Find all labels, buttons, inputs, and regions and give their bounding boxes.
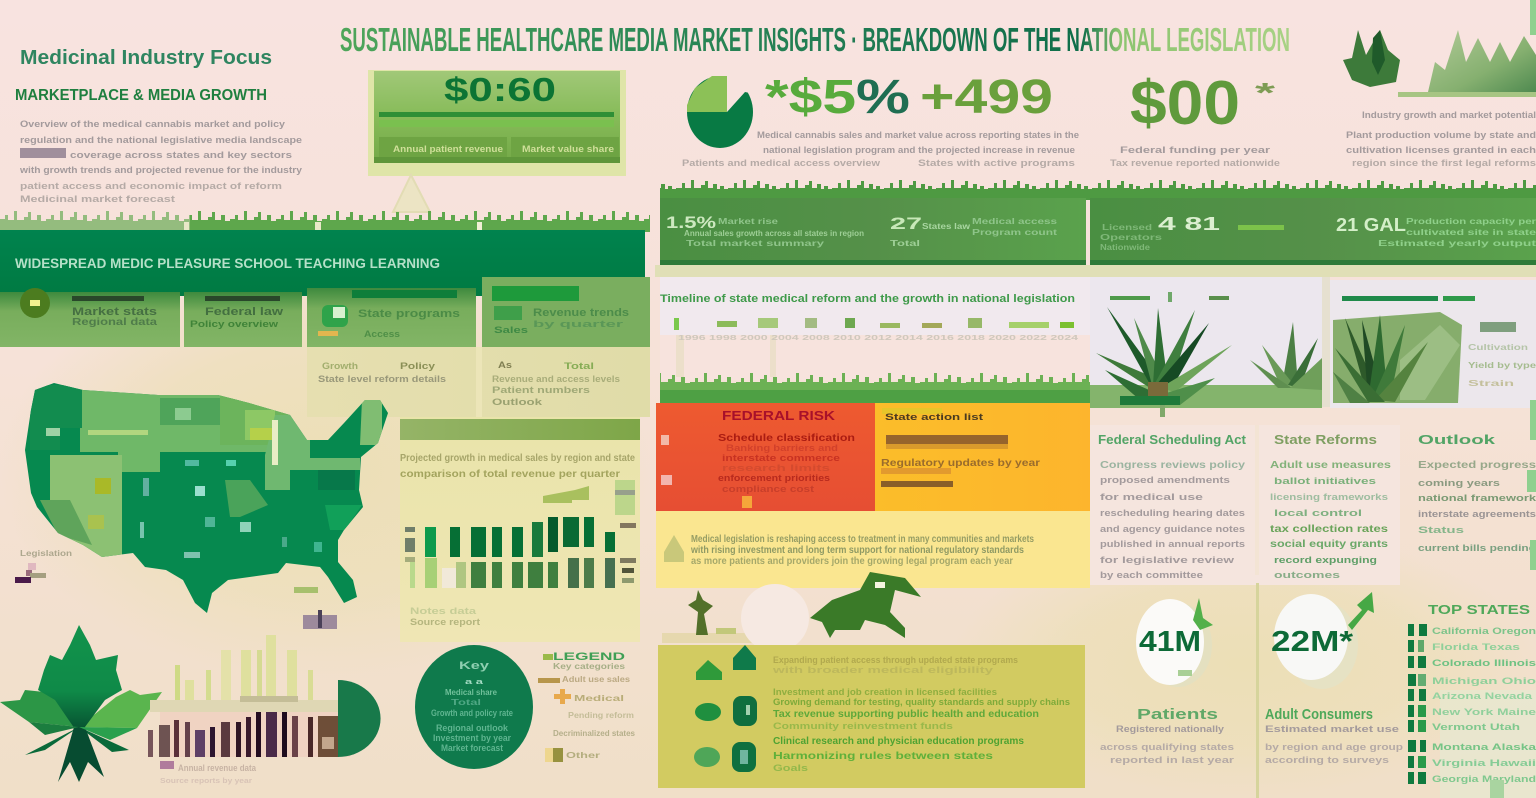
list panel bottom right: Montana Alaska — [1432, 742, 1536, 752]
circle callout: Regional outlook — [436, 723, 509, 733]
chart subtitle — [400, 453, 635, 480]
map key: Legislation — [20, 549, 72, 558]
stat 1 caption — [1100, 706, 1235, 765]
text block top right: Industry growth and market potential — [1362, 110, 1536, 120]
chart panel — [400, 417, 640, 642]
panel: plant photo 2: Strain — [1468, 379, 1514, 388]
stat circle 2: 22M* — [1271, 626, 1354, 658]
card 3: State programs — [358, 308, 460, 320]
card 4: by quarter — [533, 319, 624, 329]
stat 3: Nationwide — [1100, 243, 1151, 252]
column 2 — [1270, 432, 1392, 580]
list panel bottom right: Virginia Hawaii — [1432, 758, 1536, 768]
card 2 — [184, 292, 302, 347]
column 2: Adult use measures — [1270, 460, 1392, 471]
row 3: Clinical research and physician education programs — [773, 736, 1024, 747]
stat card: price: Market value share — [522, 144, 614, 154]
card 2: Federal law — [205, 306, 284, 318]
divider strip — [655, 265, 1536, 277]
agave in photo — [1333, 315, 1428, 403]
notes panel under cards: Revenue and access levels — [492, 374, 620, 384]
chart footnote: Notes data — [410, 606, 477, 616]
row 2: Community reinvestment funds — [773, 721, 953, 731]
notes panel under cards: Policy — [400, 361, 435, 371]
row 1 — [696, 645, 1018, 680]
stat 1: Total market summary — [686, 239, 825, 248]
column 2: ballot initiatives — [1274, 476, 1376, 486]
stat 3: 4 81 — [1158, 214, 1220, 234]
text block top right — [1346, 110, 1536, 168]
panel: plant photo 2 — [1322, 277, 1536, 408]
column 2: local control — [1274, 508, 1362, 518]
column 3: Outlook — [1418, 432, 1496, 447]
callout: red warning panel: Schedule classification — [718, 433, 855, 444]
stat 1: Annual sales growth across all states in region — [684, 229, 864, 238]
legend: Pending reform — [568, 711, 634, 720]
intro text block: with growth trends and projected revenue for the industry — [19, 165, 302, 175]
big stats: $00 — [1130, 69, 1240, 138]
card 4: Sales — [494, 325, 528, 335]
column 1: by each committee — [1100, 570, 1203, 580]
callout: yellow note: with rising investment and long term support for national regulatory standards — [690, 545, 1024, 556]
stat circle 2 — [1271, 592, 1374, 689]
column 3: national framework — [1418, 493, 1536, 503]
bar chart caption: Annual revenue data — [178, 763, 257, 773]
list panel bottom right: Michigan Ohio — [1432, 676, 1536, 686]
stat card: price: Annual patient revenue — [393, 144, 503, 154]
column 1 — [1098, 432, 1247, 580]
legend: Adult use sales — [562, 675, 631, 684]
panel row: four green cards — [0, 277, 650, 347]
intro text block: coverage across states and key sectors — [70, 150, 292, 160]
text block top right: region since the first legal reforms — [1352, 158, 1536, 168]
row 2: Investment and job creation in licensed facilities — [773, 687, 997, 697]
column 1: rescheduling hearing dates — [1100, 508, 1245, 518]
list panel bottom right: Georgia Maryland — [1432, 774, 1536, 784]
map: United States legislation status — [20, 380, 392, 620]
list panel bottom right: Vermont Utah — [1432, 722, 1520, 732]
legend: Other — [566, 751, 600, 760]
list rows — [1408, 624, 1427, 784]
column 2: State Reforms — [1274, 432, 1377, 447]
circle callout: Market forecast — [441, 743, 503, 753]
callout: red warning panel: FEDERAL RISK — [722, 408, 836, 423]
big stats — [765, 69, 1275, 138]
big stats: * — [1255, 77, 1275, 108]
western states — [50, 455, 122, 560]
small agave — [1250, 322, 1322, 390]
pale background bars — [175, 635, 313, 710]
stat 1 caption: Registered nationally — [1116, 724, 1224, 734]
intro text block: MARKETPLACE & MEDIA GROWTH — [15, 87, 267, 104]
panel: policy columns — [1090, 425, 1536, 585]
column 1: Congress reviews policy — [1100, 460, 1246, 471]
stat 4: cultivated site in state — [1406, 228, 1536, 237]
circle callout: Growth and policy rate — [431, 708, 513, 718]
stat 3: Operators — [1100, 233, 1163, 242]
large agave — [1096, 307, 1232, 405]
column 2: outcomes — [1274, 570, 1340, 580]
column 1: for legislative review — [1100, 555, 1236, 565]
callout: orange panel — [875, 403, 1090, 511]
column 3: Expected progress — [1418, 460, 1536, 471]
stat 2: Total — [890, 239, 920, 248]
intro text block: patient access and economic impact of reform — [20, 181, 282, 191]
row 1: Expanding patient access through updated state programs — [773, 655, 1018, 665]
stat 2: Medical access — [972, 217, 1058, 226]
stat 2 caption: according to surveys — [1265, 755, 1389, 765]
circle callout: Key — [459, 660, 490, 672]
callout: red warning panel: compliance cost — [722, 484, 814, 494]
chart subtitle: Projected growth in medical sales by region and state — [400, 453, 635, 464]
icon: large cannabis leaf — [0, 625, 162, 782]
pie: half-circle — [338, 680, 381, 757]
label band — [150, 700, 348, 712]
notes panel under cards — [307, 347, 650, 417]
divider vertical — [1256, 583, 1259, 798]
stat descriptions: Patients and medical access overview — [682, 158, 881, 168]
column 3: Status — [1418, 525, 1464, 535]
column 2: licensing frameworks — [1270, 492, 1388, 502]
callout: red warning panel: research limits — [722, 463, 830, 473]
banner: left: WIDESPREAD MEDIC PLEASURE SCHOOL TEACHING LEARNING — [15, 255, 440, 271]
icon: note leaf — [664, 535, 684, 562]
callout: yellow note: Medical legislation is reshaping access to treatment in many communities and markets — [691, 534, 1034, 545]
card 1 — [0, 288, 180, 347]
row 3: Harmonizing rules between states — [773, 751, 994, 762]
legend: LEGEND — [553, 651, 625, 663]
column 1: and agency guidance notes — [1100, 524, 1245, 534]
callout: red warning panel: enforcement priorities — [718, 473, 830, 483]
card 4: Revenue trends — [533, 307, 629, 319]
chart header — [400, 419, 640, 440]
list panel bottom right: California Oregon — [1432, 626, 1536, 636]
banner: left — [0, 230, 645, 296]
notes panel under cards: State level reform details — [318, 374, 446, 384]
stat 4: Estimated yearly output — [1378, 239, 1536, 248]
panel: olive list — [658, 645, 1085, 788]
callout: red warning panel — [656, 403, 875, 511]
big stats: +499 — [920, 71, 1053, 124]
stat descriptions: States with active programs — [918, 158, 1075, 168]
legend: Medical — [574, 694, 624, 703]
callout: orange panel: State action list — [885, 412, 983, 422]
pie chart — [687, 70, 760, 148]
legend: Key categories — [553, 662, 626, 671]
northern states — [80, 385, 285, 472]
notes panel under cards: Total — [564, 361, 594, 371]
callout: red warning panel: Banking barriers and — [726, 443, 838, 453]
column 1: proposed amendments — [1100, 475, 1230, 485]
stat 1: 1.5% — [666, 213, 716, 232]
stat descriptions: Medical cannabis sales and market value across reporting states in the — [757, 130, 1079, 140]
stat 2: 27 — [890, 214, 922, 233]
stat 4 — [1336, 215, 1536, 248]
column 1: Federal Scheduling Act — [1098, 432, 1247, 447]
stat descriptions — [682, 130, 1280, 168]
intro text block: Overview of the medical cannabis market and policy — [20, 119, 285, 129]
panel: plant photo 1 — [1090, 277, 1322, 417]
bars: lower — [410, 558, 615, 588]
callout: orange panel: Regulatory updates by year — [881, 458, 1040, 469]
stat 1 caption: reported in last year — [1110, 755, 1235, 765]
circle callout: Medical share — [445, 688, 498, 697]
stat circle 1 — [1136, 598, 1213, 687]
text block top right: Plant production volume by state and — [1346, 130, 1536, 140]
stat descriptions: Tax revenue reported nationwide — [1110, 158, 1280, 168]
stat 2 caption — [1265, 706, 1404, 765]
panel: timeline: 1996 1998 2000 2004 2008 2010 2012 2014 2016 2018 2020 2022 2024 — [678, 335, 1078, 342]
stat 2 caption: by region and age group — [1265, 742, 1404, 752]
timeline markers — [674, 318, 1074, 330]
row 1: with broader medical eligibility — [771, 665, 993, 675]
list panel bottom right: Florida Texas — [1432, 642, 1520, 652]
legend: Decriminalized states — [553, 729, 636, 738]
column 1: for medical use — [1100, 492, 1203, 502]
card 4 — [482, 277, 650, 347]
bar chart: revenue history: Source reports by year — [160, 778, 252, 785]
notes panel under cards: As — [498, 360, 512, 370]
stat 1: Market rise — [718, 217, 779, 226]
stat 3 — [1100, 214, 1284, 252]
list panel bottom right — [1408, 602, 1536, 798]
intro text block: regulation and the national legislative media landscape — [20, 135, 302, 145]
stat 2 — [890, 214, 1058, 248]
column 2: record expunging — [1274, 555, 1377, 565]
chart legend swatches — [615, 480, 635, 515]
panel: plant photo 2: Yield by type — [1468, 361, 1536, 370]
text block top right: cultivation licenses granted in each — [1346, 145, 1536, 155]
stat 2 caption: Estimated market use — [1265, 724, 1399, 734]
stat 3: Licensed — [1102, 223, 1152, 232]
panel: plant photo 2: Cultivation — [1468, 343, 1528, 352]
card 1: Market stats — [72, 306, 157, 318]
circle callout: Total — [451, 698, 481, 707]
stat 4: Production capacity per — [1406, 217, 1536, 226]
stat 2: Program count — [972, 228, 1057, 237]
row 3: Goals — [773, 763, 808, 773]
stat 1 caption: across qualifying states — [1100, 742, 1234, 752]
axis ticks — [405, 523, 636, 583]
row 2 — [695, 687, 1070, 731]
panel: timeline — [660, 277, 1090, 380]
ground grass — [1090, 385, 1322, 408]
stat 2 caption: Adult Consumers — [1265, 706, 1373, 723]
chart subtitle: comparison of total revenue per quarter — [400, 469, 620, 480]
stat 2: States law — [922, 222, 971, 231]
icon: plants top right — [1343, 30, 1536, 97]
chart panel: Source report — [410, 617, 480, 627]
column 2: social equity grants — [1270, 539, 1389, 550]
circle callout: Investment by year — [433, 733, 511, 743]
stat 1 caption: Patients — [1137, 706, 1218, 723]
circle callout: a a — [465, 679, 483, 686]
column 3: current bills pending — [1418, 543, 1536, 553]
stat descriptions: national legislation program and the projected increase in revenue — [763, 145, 1075, 155]
banner: statistics — [660, 198, 1536, 265]
map key — [15, 549, 337, 629]
notes panel under cards: Patient numbers — [492, 385, 590, 395]
bars: upper — [425, 517, 615, 557]
grass strip: left — [0, 210, 650, 232]
row 2: Growing demand for testing, quality standards and supply chains — [773, 697, 1070, 707]
column 2: tax collection rates — [1270, 524, 1389, 535]
list panel bottom right: Arizona Nevada — [1432, 691, 1533, 701]
callout: red warning panel: interstate commerce — [722, 453, 840, 463]
intro text block: Medicinal market forecast — [20, 194, 175, 204]
state labels — [46, 428, 60, 436]
list panel bottom right: Colorado Illinois — [1432, 658, 1536, 668]
legend — [538, 651, 636, 762]
row 2: Tax revenue supporting public health and education — [773, 709, 1039, 720]
card 3 — [307, 288, 476, 347]
grass strip: mid — [660, 372, 1090, 403]
stat 4: 21 GAL — [1336, 215, 1406, 235]
callout: yellow note: as more patients and providers join the growing legal program each year — [691, 556, 1013, 567]
edge foliage right — [1490, 0, 1536, 798]
column 1: published in annual reports — [1100, 539, 1245, 549]
list panel bottom right: TOP STATES — [1428, 602, 1530, 617]
great lakes and northeast — [265, 415, 360, 490]
notes panel under cards: Outlook — [492, 397, 543, 407]
row 3 — [694, 736, 1024, 773]
stat descriptions: Federal funding per year — [1120, 145, 1271, 155]
list panel bottom right: New York Maine — [1432, 707, 1536, 717]
intro text block: Medicinal Industry Focus — [20, 47, 272, 69]
bar chart: revenue history — [148, 635, 350, 785]
intro text block — [15, 47, 302, 204]
dark bars — [148, 712, 338, 757]
panel: timeline: Timeline of state medical reform and the growth in national legislation — [660, 293, 1075, 305]
triangle pointer — [393, 175, 430, 212]
column 3: interstate agreements — [1418, 509, 1536, 519]
grass strip: top right — [660, 180, 1536, 200]
stat circle 1: 41M — [1139, 626, 1201, 658]
callout: yellow note — [656, 511, 1090, 588]
column 3: coming years — [1418, 478, 1500, 488]
stat 1 — [666, 213, 864, 248]
card 3: Access — [364, 329, 400, 339]
illustration: plants and cloud — [662, 572, 921, 652]
circle callout — [415, 645, 533, 769]
notes panel under cards: Growth — [322, 361, 358, 371]
stat card: price — [368, 70, 626, 176]
stat card: price: $0:60 — [444, 71, 556, 108]
big stats: *$5 % — [765, 71, 910, 124]
card 2: Policy overview — [190, 319, 279, 329]
card 1: Regional data — [72, 317, 158, 328]
trend marker — [543, 486, 589, 503]
column 3 — [1418, 432, 1536, 553]
